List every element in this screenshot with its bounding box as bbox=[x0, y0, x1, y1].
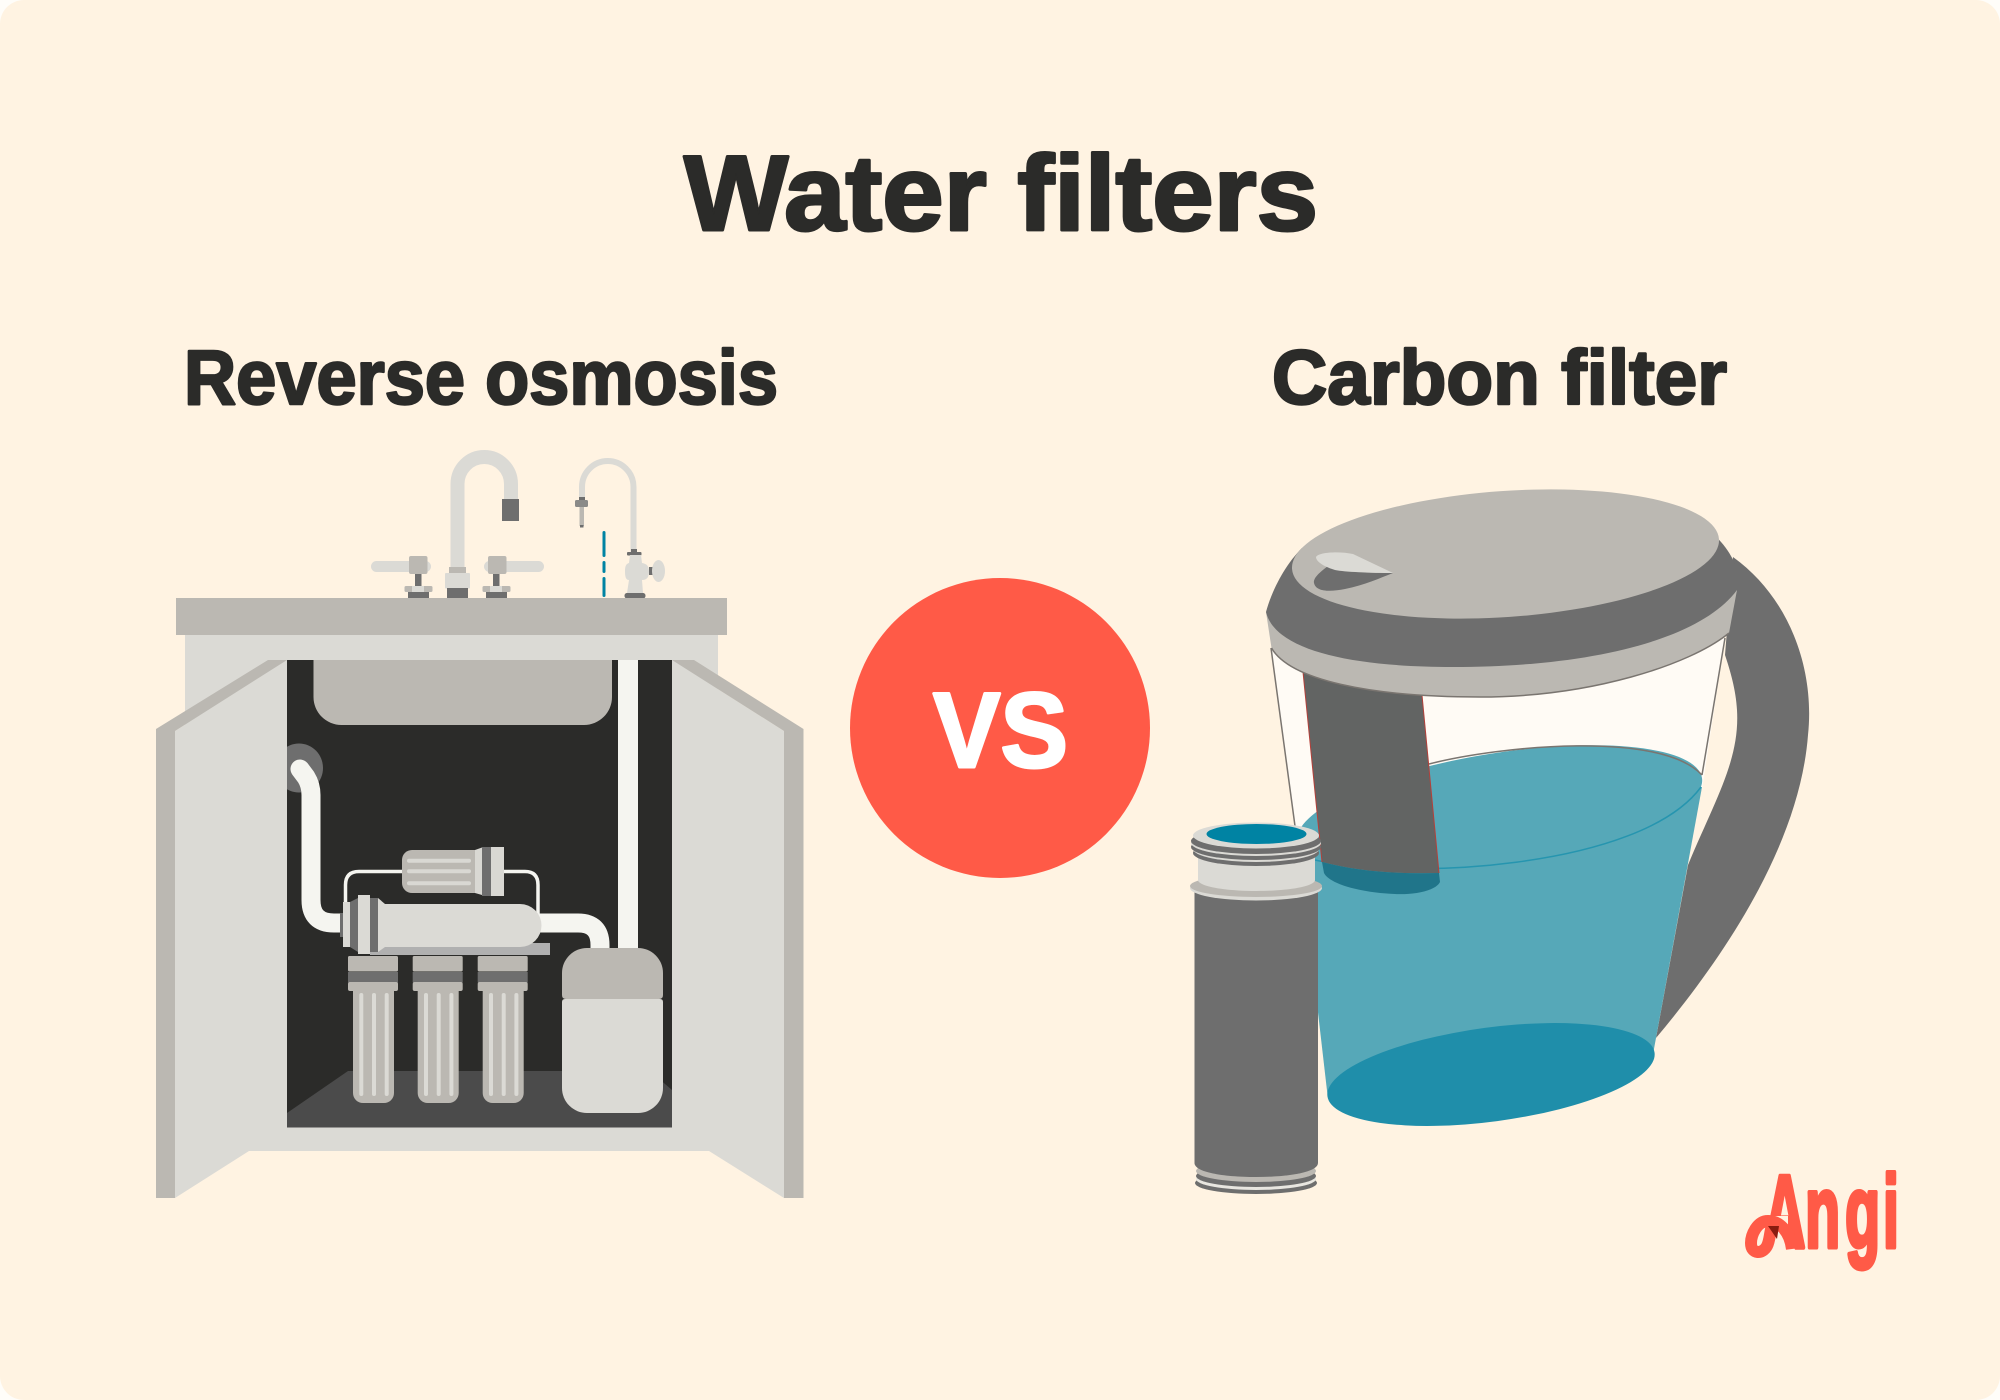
water stream bbox=[602, 531, 606, 597]
left door edge bbox=[156, 660, 287, 1198]
cartridge neck bbox=[1198, 855, 1315, 891]
left faucet handle bbox=[371, 556, 432, 598]
main faucet bbox=[445, 457, 519, 598]
lid skirt bbox=[1266, 530, 1738, 667]
lid spout bbox=[1314, 552, 1393, 591]
illustration: reverse osmosis sink cabinet bbox=[156, 457, 804, 1198]
storage tank bbox=[562, 948, 663, 1113]
cabinet body bbox=[185, 635, 718, 735]
heading: reverse osmosis: Reverse osmosis bbox=[184, 335, 778, 421]
drain pipe bbox=[618, 660, 638, 955]
main filter housing bbox=[340, 895, 542, 954]
left door and floor panel bbox=[175, 660, 784, 1198]
pre-filter 1 bbox=[348, 956, 398, 1103]
sink basin bbox=[314, 660, 612, 725]
cartridge lower rings bbox=[1195, 1160, 1317, 1194]
water bbox=[1288, 722, 1711, 1095]
pitcher handle bbox=[1656, 557, 1809, 1038]
vs badge bbox=[850, 578, 1150, 878]
carbon cartridge bbox=[1190, 822, 1322, 1194]
heading: carbon filter: Carbon filter bbox=[1272, 335, 1727, 421]
pre-filter 2 bbox=[413, 956, 463, 1103]
pitcher base bbox=[1321, 1006, 1661, 1143]
pitcher glass bbox=[1271, 638, 1725, 840]
lid top bbox=[1288, 476, 1723, 632]
upper membrane filter bbox=[402, 847, 504, 896]
pitcher rim band bbox=[1266, 590, 1737, 697]
cartridge body bbox=[1194, 890, 1318, 1177]
title: Water filters bbox=[684, 133, 1318, 253]
cartridge threads bbox=[1191, 822, 1321, 866]
cartridge opening bbox=[1206, 824, 1306, 844]
countertop bbox=[176, 598, 727, 635]
shelf bbox=[370, 943, 550, 955]
right door edge bbox=[672, 660, 804, 1198]
inner filter column bbox=[1303, 672, 1440, 894]
pre-filter 3 bbox=[478, 956, 528, 1103]
cartridge flange bbox=[1190, 875, 1322, 900]
filtered water faucet bbox=[575, 461, 665, 598]
wall outlet bbox=[275, 744, 323, 792]
rim edge line bbox=[1272, 633, 1729, 697]
cabinet floor bbox=[287, 1071, 672, 1128]
angi logo: Angi bbox=[1764, 1154, 1899, 1269]
cabinet interior bbox=[287, 660, 672, 1128]
thin connecting pipe bbox=[346, 872, 538, 915]
tank connector pipe bbox=[530, 923, 600, 952]
supply pipe bbox=[300, 769, 345, 923]
right faucet handle bbox=[482, 556, 544, 598]
vs badge: VS bbox=[933, 670, 1068, 790]
illustration: carbon filter pitcher bbox=[1190, 476, 1809, 1194]
